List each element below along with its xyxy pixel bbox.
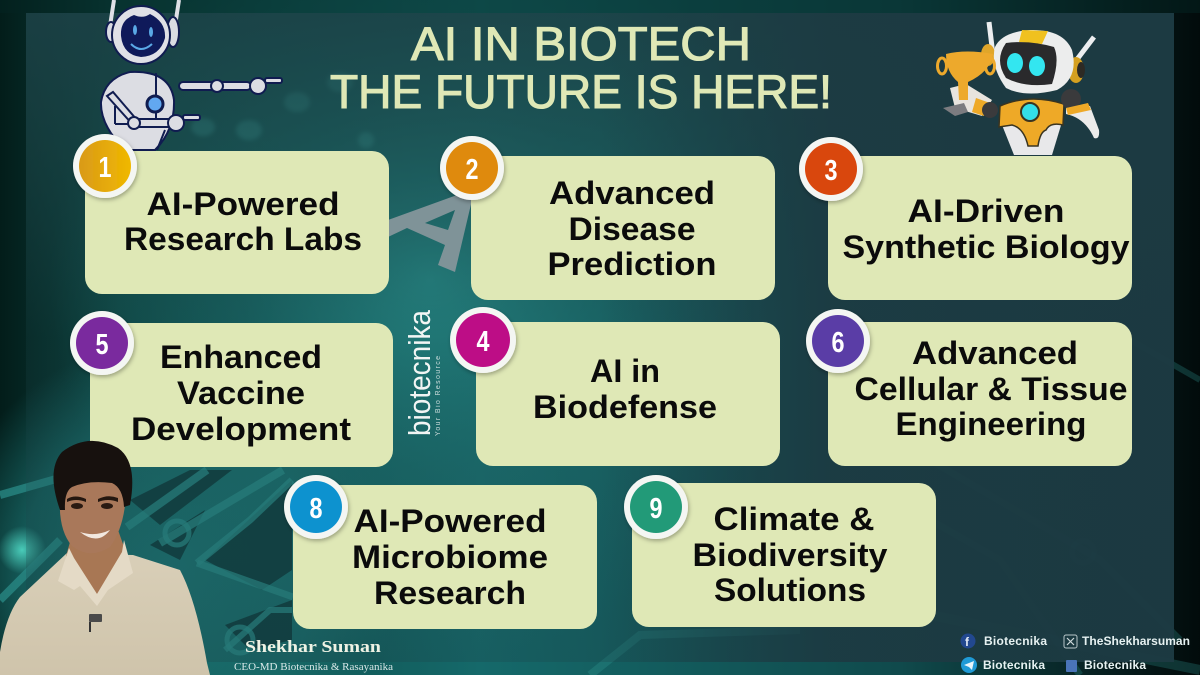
card 8: AI-Powered <box>354 503 546 539</box>
social links: Biotecnika <box>1084 658 1146 672</box>
card 4 <box>476 322 780 466</box>
card 2: Prediction <box>548 246 716 282</box>
badge 4: 4 <box>476 326 490 358</box>
title: AI IN BIOTECH <box>411 17 751 70</box>
card 5: Enhanced <box>160 339 322 375</box>
card 5: Vaccine <box>177 375 305 411</box>
social links <box>960 634 1190 673</box>
badge 3: 3 <box>824 155 838 187</box>
badge 3 <box>799 137 863 201</box>
icon: robot with trophy <box>938 22 1099 155</box>
card 6 <box>828 322 1132 466</box>
social links: TheShekharsuman <box>1082 634 1190 648</box>
badge 4 <box>450 307 516 373</box>
logo: biotecnika: biotecnika <box>402 309 437 436</box>
social links: Biotecnika <box>984 634 1047 648</box>
card 6: Cellular & Tissue <box>854 371 1128 407</box>
social links: Biotecnika <box>983 658 1045 672</box>
card 9: Climate & <box>714 501 874 537</box>
card 8: Microbiome <box>352 539 548 575</box>
card 9 <box>632 483 936 627</box>
speaker name: Shekhar Suman <box>245 637 382 656</box>
card 1: Research Labs <box>124 221 362 257</box>
card 9: Biodiversity <box>692 537 888 573</box>
badge 2: 2 <box>466 154 478 186</box>
badge 8: 8 <box>310 493 322 525</box>
card 2: Disease <box>568 211 696 247</box>
badge 1 <box>73 134 137 198</box>
card 6: Engineering <box>896 406 1086 442</box>
badge 8 <box>284 475 348 539</box>
card 3: Synthetic Biology <box>842 229 1130 265</box>
badge 5 <box>70 311 134 375</box>
card 1: AI-Powered <box>146 186 340 222</box>
card 1 <box>85 151 389 294</box>
card 4: AI in <box>590 353 660 389</box>
speaker role: CEO-MD Biotecnika & Rasayanika <box>234 662 393 673</box>
title: THE FUTURE IS HERE! <box>330 65 832 118</box>
card 3: AI-Driven <box>908 193 1064 229</box>
badge 5: 5 <box>96 329 108 361</box>
card 8: Research <box>374 575 526 611</box>
watermark letter A <box>388 195 472 272</box>
card 4: Biodefense <box>533 389 717 425</box>
card 5: Development <box>131 411 351 447</box>
badge 6: 6 <box>832 327 844 359</box>
badge 1: 1 <box>98 152 112 184</box>
card 9: Solutions <box>714 572 866 608</box>
badge 9 <box>624 475 688 539</box>
title <box>330 17 832 118</box>
card 2 <box>471 156 775 300</box>
social links: f <box>965 635 970 649</box>
card 3 <box>828 156 1132 300</box>
portrait: Shekhar Suman <box>0 441 210 675</box>
card 8 <box>293 485 597 629</box>
card 2: Advanced <box>549 175 715 211</box>
badge 6 <box>806 309 870 373</box>
logo: biotecnika: Your Bio Resource <box>435 356 442 436</box>
badge 9: 9 <box>650 493 662 525</box>
card 6: Advanced <box>912 335 1078 371</box>
card 5 <box>90 323 393 467</box>
icon: pointing robot <box>101 0 282 150</box>
badge 2 <box>440 136 504 200</box>
